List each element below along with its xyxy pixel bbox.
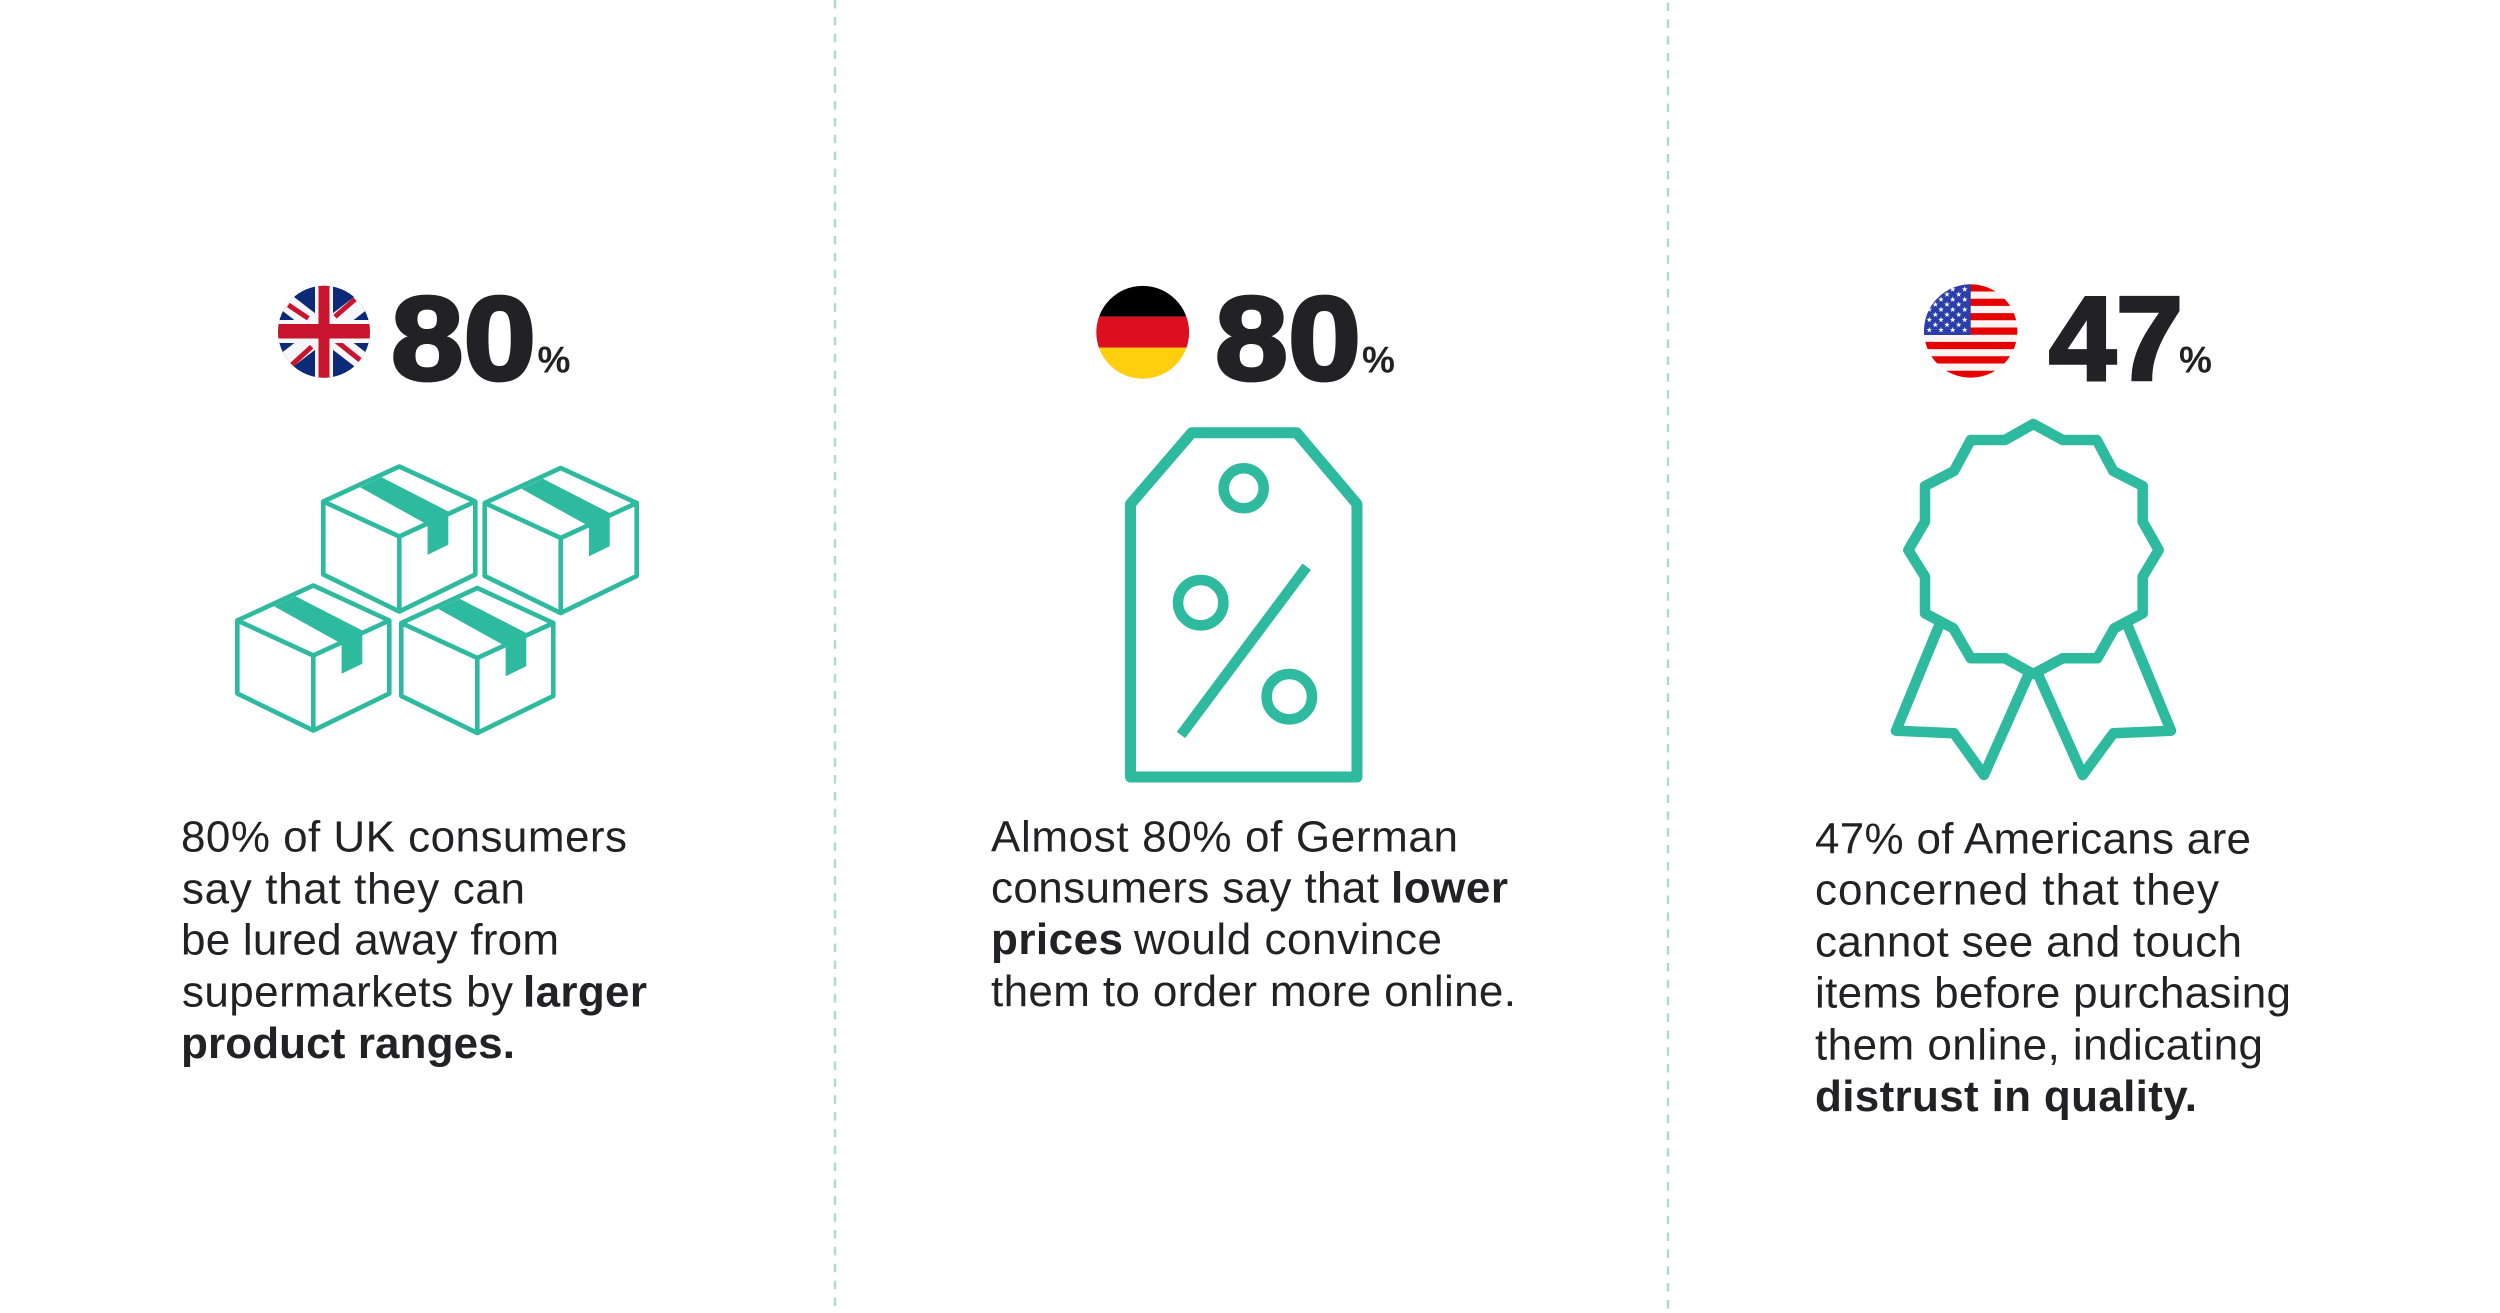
ribbon: left [1896, 623, 2028, 775]
box: bottom middle [401, 588, 553, 733]
text block: Germany description: consumers say that [991, 864, 1379, 913]
text block: Germany description: would convince [1133, 915, 1442, 964]
rosette seal [1908, 424, 2159, 674]
text block: Germany description: Almost 80% of German [991, 813, 1458, 862]
text block: Germany description: prices [991, 915, 1123, 964]
text block: UK description: say that they can [182, 864, 525, 913]
UK statistic: 80%: 80 [391, 272, 536, 406]
text block: UK description: product ranges. [181, 1019, 515, 1068]
UK statistic: 80%: % [538, 340, 570, 380]
text block: UK description [181, 813, 647, 1068]
box: top middle [323, 466, 475, 612]
text block: USA description: cannot see and touch [1815, 918, 2242, 966]
text block: Germany description: lower [1391, 864, 1508, 913]
Germany statistic: 80%: 80 [1215, 272, 1361, 406]
icon: German flag [1096, 285, 1190, 380]
icon: award rosette [1896, 424, 2171, 775]
USA statistic: 47%: % [2179, 340, 2212, 380]
panel: Germany [991, 272, 1516, 1016]
text block: Germany description: them to order more online. [991, 967, 1516, 1016]
text block: UK description: 80% of UK consumers [181, 813, 627, 862]
text block: UK description: be lured away from [181, 916, 559, 964]
Germany statistic: 80%: % [1362, 340, 1395, 380]
text block: USA description: them online, indicating [1815, 1020, 2263, 1070]
text block: UK description: larger [523, 968, 647, 1016]
text block: USA description: items before purchasing [1815, 968, 2291, 1018]
text block: USA description [1815, 814, 2291, 1121]
icon: US flag [1924, 284, 2018, 378]
panel: UK [181, 272, 647, 1068]
box: bottom left [237, 586, 389, 730]
ribbon: right [2038, 623, 2171, 775]
text block: USA description: distrust in quality. [1815, 1072, 2197, 1121]
icon: stacked boxes [237, 466, 637, 733]
box: top right [485, 468, 637, 613]
text block: USA description: concerned that they [1815, 866, 2219, 914]
text block: USA description: 47% of Americans are [1815, 814, 2251, 863]
text block: UK description: supermarkets by [182, 968, 513, 1016]
USA statistic: 47%: 47 [2049, 272, 2183, 406]
text block: Germany description [991, 813, 1516, 1016]
panel: USA [1815, 272, 2291, 1121]
icon: UK flag [278, 285, 370, 378]
icon: price tag with percent [1130, 433, 1357, 777]
